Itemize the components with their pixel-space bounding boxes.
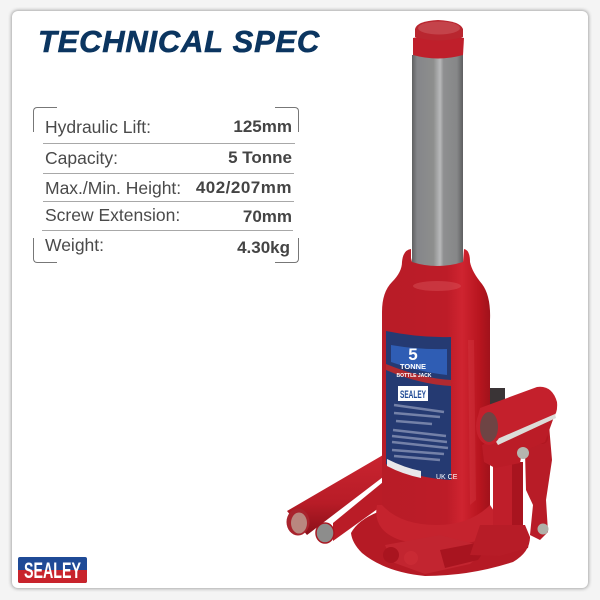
pump link bbox=[525, 425, 552, 540]
spec row: capacity: 5 Tonne bbox=[228, 148, 292, 167]
spec row: capacity bbox=[45, 148, 292, 168]
spec row: weight: Weight: bbox=[45, 235, 104, 255]
panel: specification table bbox=[33, 107, 299, 263]
spec row: screw extension bbox=[45, 205, 292, 226]
product label: TONNE bbox=[400, 362, 426, 371]
product label bbox=[386, 331, 458, 481]
handle tubes bbox=[286, 455, 383, 543]
ram cylinder bbox=[412, 55, 463, 267]
spec row: height: 402/207mm bbox=[196, 178, 292, 197]
spec row: hydraulic lift bbox=[45, 117, 292, 137]
spec row: screw extension: Screw Extension: bbox=[45, 205, 180, 225]
spec row: hydraulic lift: Hydraulic Lift: bbox=[45, 117, 151, 137]
spec row: height: Max./Min. Height: bbox=[45, 178, 181, 198]
title: TECHNICAL SPEC bbox=[38, 24, 320, 59]
rear bracket bbox=[488, 388, 505, 414]
jack body bbox=[382, 249, 490, 525]
spec row: hydraulic lift: 125mm bbox=[233, 117, 292, 136]
pump socket bbox=[476, 387, 557, 468]
logo: Sealey: SEALEY bbox=[24, 558, 81, 583]
spec row: capacity: Capacity: bbox=[45, 148, 118, 168]
spec row: height bbox=[45, 178, 292, 198]
product label: UK CE bbox=[436, 474, 458, 481]
base flange bbox=[351, 505, 530, 576]
product label: BOTTLE JACK bbox=[396, 373, 432, 379]
ram cap bbox=[413, 20, 464, 58]
spec row: screw extension: 70mm bbox=[243, 207, 292, 226]
product label: SEALEY bbox=[400, 389, 426, 401]
logo: Sealey bbox=[18, 557, 87, 583]
spec row: weight: 4.30kg bbox=[237, 238, 290, 257]
product label: 5 bbox=[408, 345, 418, 364]
pump post bbox=[470, 462, 530, 556]
spec row: weight bbox=[45, 235, 290, 257]
